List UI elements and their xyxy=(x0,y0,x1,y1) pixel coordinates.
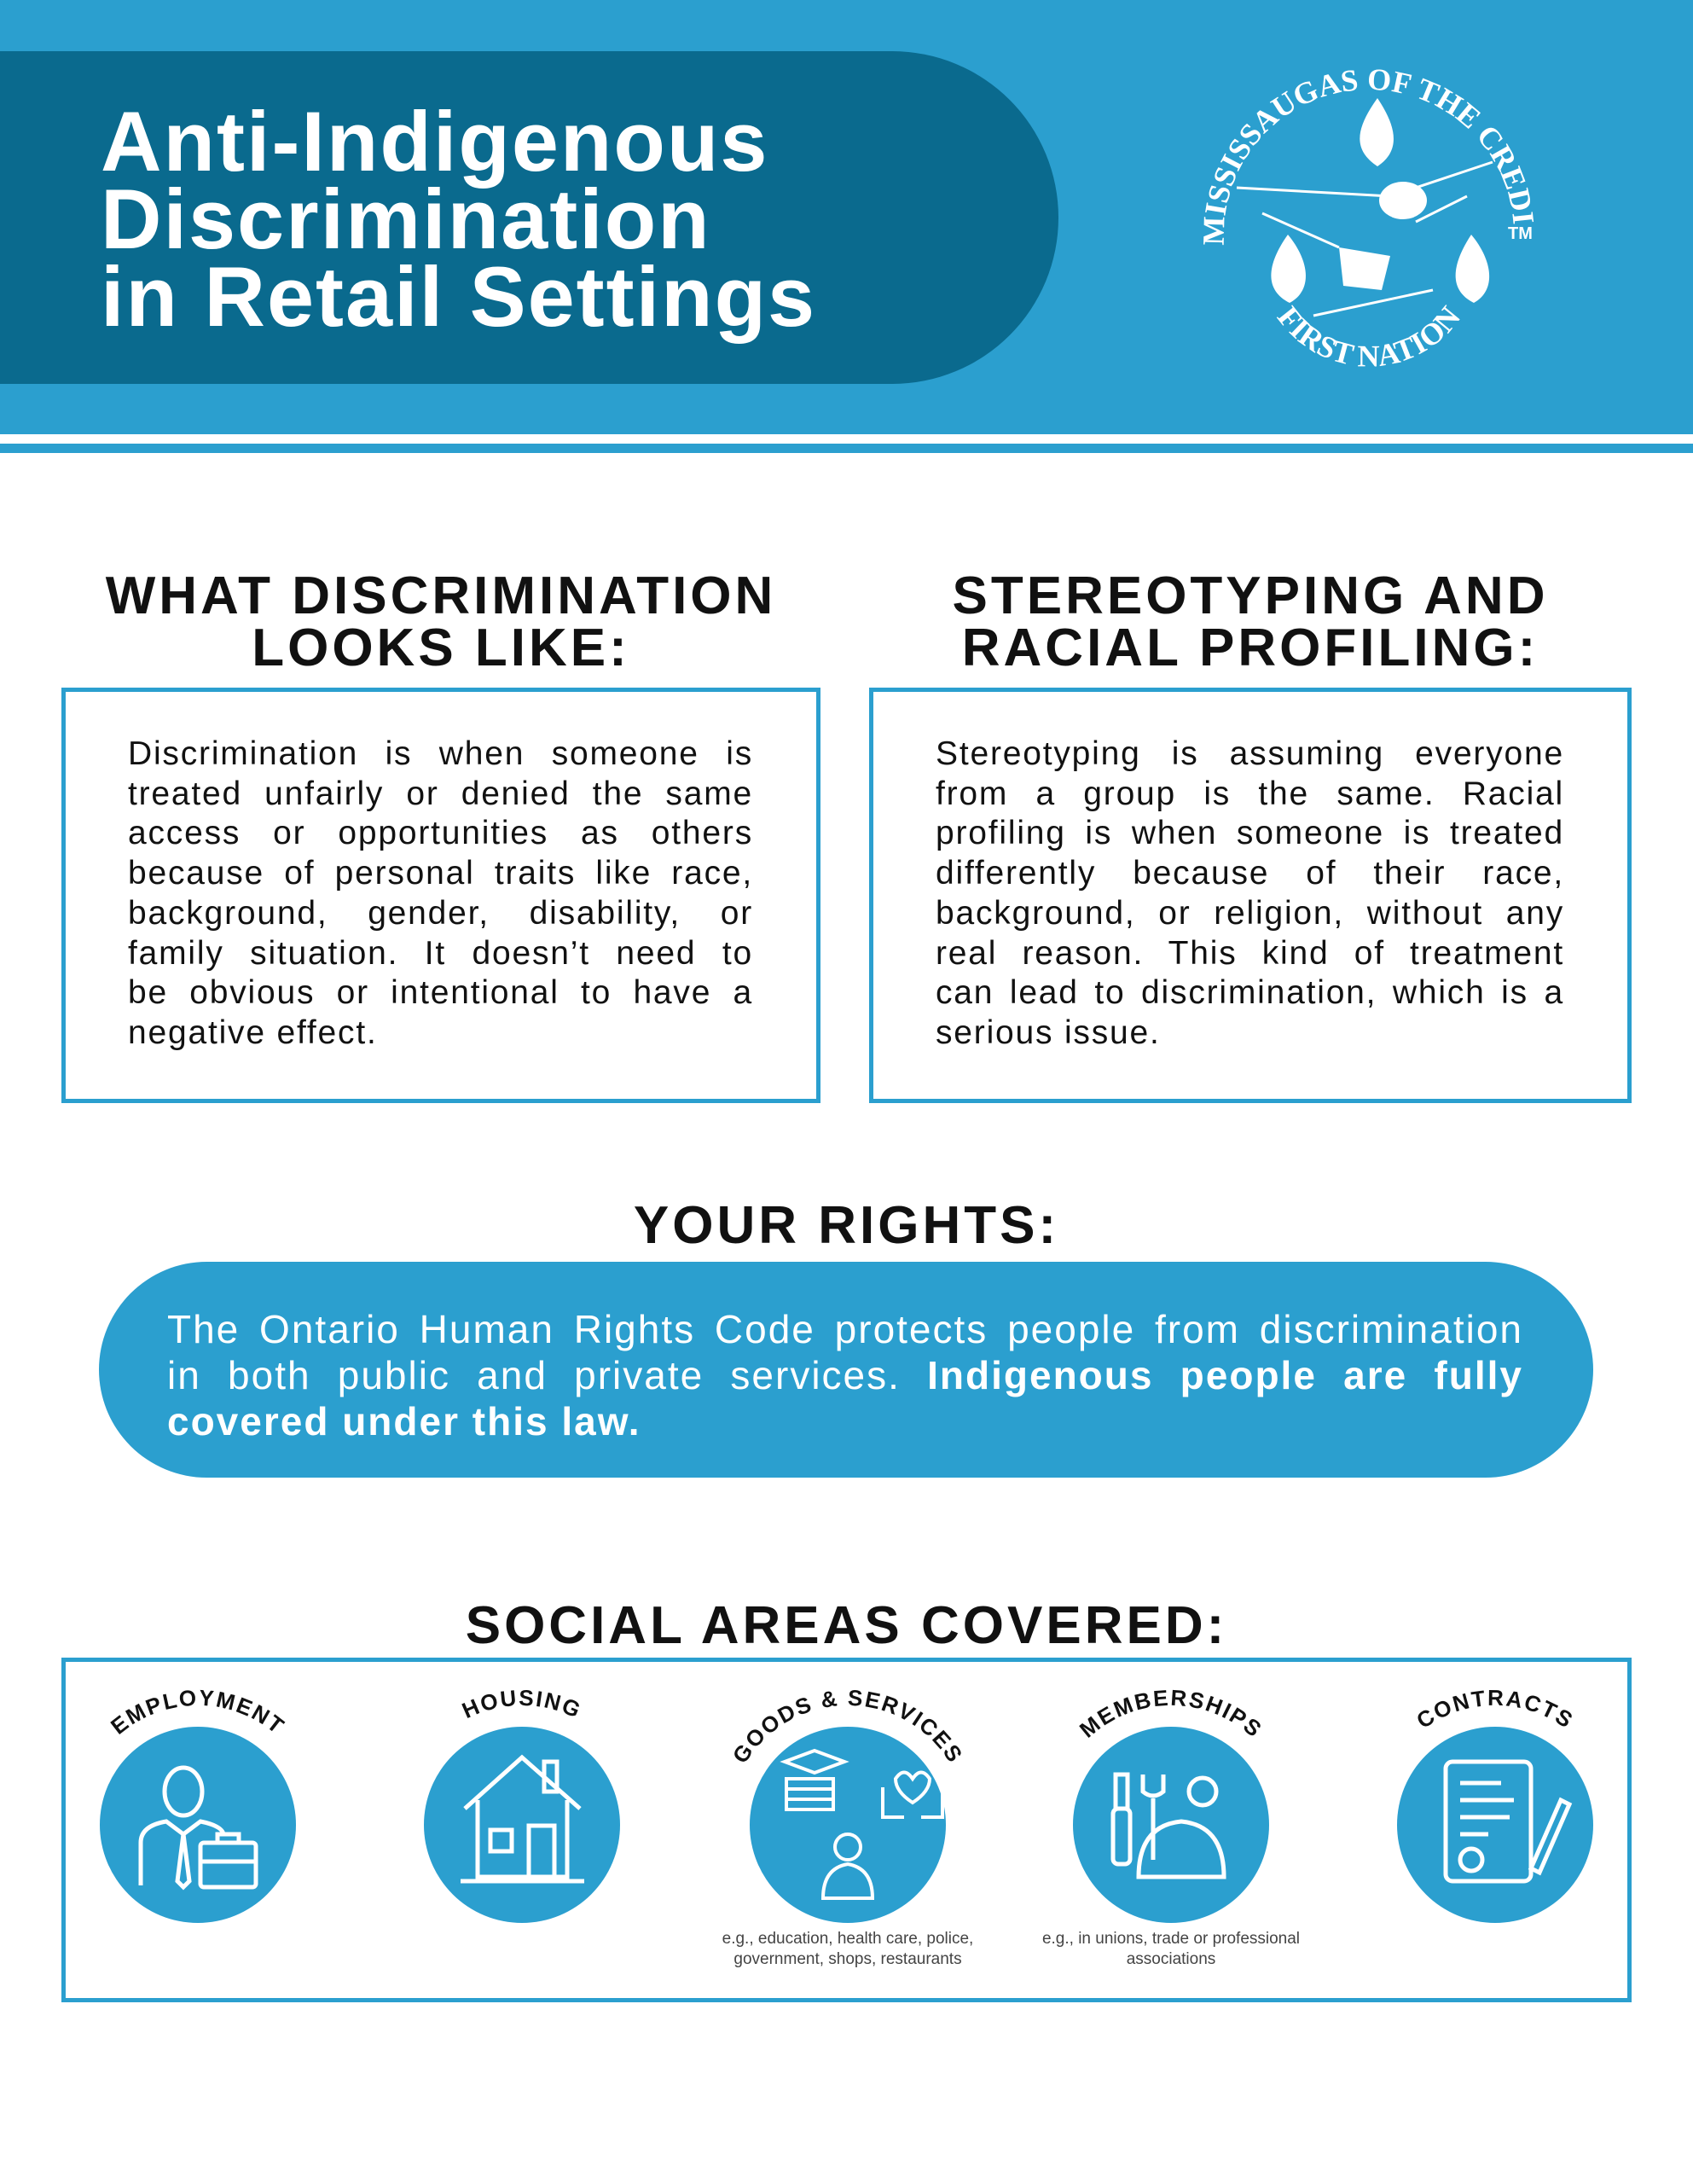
title: Anti-Indigenous xyxy=(101,94,768,189)
rights text: The Ontario Human Rights Code protects people from discrimination xyxy=(167,1307,1523,1351)
heading: what discrimination looks like: WHAT DISCRIMINATION xyxy=(106,566,776,625)
heading: stereotyping xyxy=(952,566,1549,677)
text: discrimination definition: access or opportunities as others xyxy=(128,815,753,851)
title xyxy=(101,94,816,344)
heading: social areas: SOCIAL AREAS COVERED: xyxy=(466,1596,1227,1655)
text: stereotyping definition: can lead to discrimination, which is a xyxy=(936,974,1564,1011)
icon: employment xyxy=(100,1727,296,1923)
label: memberships: MEMBERSHIPS xyxy=(1079,1689,1261,1738)
label: contracts: CONTRACTS xyxy=(1418,1690,1572,1727)
text: stereotyping definition: profiling is when someone is treated xyxy=(936,815,1564,851)
icon: goods & services xyxy=(750,1727,946,1923)
heading: what discrimination looks like xyxy=(106,566,776,677)
logo: FIRST NATION xyxy=(1276,305,1460,367)
header band xyxy=(0,0,1693,434)
rights text: in both public and private services. Indigenous people are fully xyxy=(167,1353,1523,1397)
text: discrimination definition: negative effect. xyxy=(128,1014,378,1051)
text: discrimination definition: because of personal traits like race, xyxy=(128,855,753,892)
rights text: covered under this law. xyxy=(167,1399,641,1443)
label: housing: HOUSING xyxy=(461,1690,579,1718)
divider line xyxy=(0,444,1693,453)
text: discrimination definition: be obvious or intentional to have a xyxy=(128,974,753,1011)
social area icons: government, shops, restaurants xyxy=(733,1950,962,1968)
text: stereotyping definition: real reason. This kind of treatment xyxy=(936,935,1564,972)
logo xyxy=(1203,70,1534,367)
panel: stereotyping xyxy=(869,688,1632,1103)
icon: housing xyxy=(424,1727,620,1923)
rights text xyxy=(167,1307,1523,1443)
caption: goods & services: e.g., education, health care, police, xyxy=(722,1930,973,1948)
text: discrimination definition: Discrimination is when someone is xyxy=(128,735,753,772)
rights pill xyxy=(99,1262,1593,1478)
text: discrimination definition xyxy=(128,735,753,1051)
text: stereotyping definition: serious issue. xyxy=(936,1014,1161,1051)
text: stereotyping definition: Stereotyping is assuming everyone xyxy=(936,735,1564,772)
title: Discrimination xyxy=(101,171,711,266)
icon: contracts xyxy=(1397,1727,1593,1923)
text: stereotyping definition: from a group is the same. Racial xyxy=(936,775,1564,812)
text: discrimination definition: treated unfairly or denied the same xyxy=(128,775,753,812)
panel: discrimination xyxy=(61,688,820,1103)
label: goods & services: GOODS & SERVICES xyxy=(734,1690,961,1762)
title: in Retail Settings xyxy=(101,249,816,344)
text: discrimination definition: background, gender, disability, or xyxy=(128,895,753,932)
social area icons xyxy=(100,1689,1593,1968)
title pill xyxy=(0,51,1058,384)
text: stereotyping definition: differently because of their race, xyxy=(936,855,1564,892)
caption: memberships: e.g., in unions, trade or professional xyxy=(1042,1930,1300,1948)
logo: TM xyxy=(1508,224,1533,243)
heading: stereotyping: RACIAL PROFILING: xyxy=(962,619,1539,677)
social area icons: associations xyxy=(1127,1950,1215,1968)
icon: memberships xyxy=(1073,1727,1269,1923)
heading: what discrimination looks like: LOOKS LIKE: xyxy=(252,619,630,677)
text: discrimination definition: family situation. It doesn’t need to xyxy=(128,935,753,972)
label: employment: EMPLOYMENT xyxy=(110,1689,285,1734)
text: stereotyping definition xyxy=(936,735,1564,1051)
text: stereotyping definition: background, or religion, without any xyxy=(936,895,1564,932)
heading: stereotyping: STEREOTYPING AND xyxy=(952,566,1549,625)
panel: social areas xyxy=(61,1658,1632,2002)
heading: your rights: YOUR RIGHTS: xyxy=(634,1196,1059,1255)
